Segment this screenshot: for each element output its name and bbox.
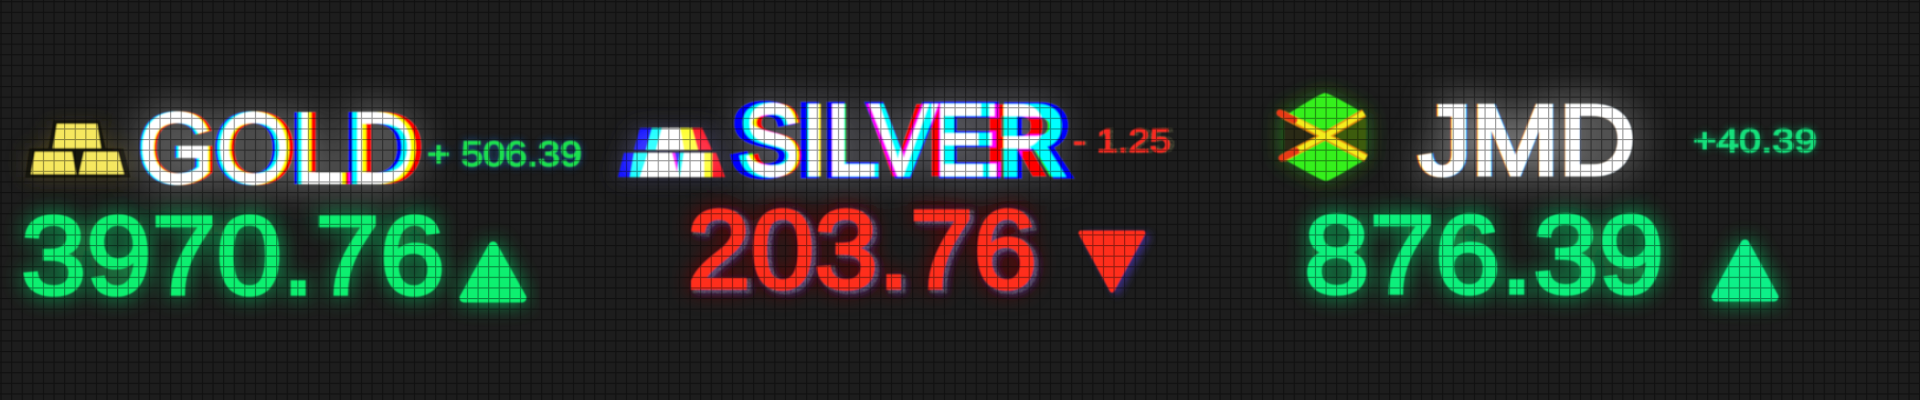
value: 876.39: 876.39 <box>1304 193 1664 317</box>
heading: GOLD: GOLD <box>138 93 418 203</box>
heading: GOLD: GOLD <box>140 93 424 203</box>
heading: GOLD: GOLD <box>138 93 418 203</box>
arrow: down <box>1081 233 1148 293</box>
heading: JMD: JMD <box>1419 85 1635 195</box>
heading: SILVER: SILVER <box>738 85 1066 195</box>
change: minus 1.25: - 1.25 <box>1075 122 1175 159</box>
value: 203.76: 203.76 <box>687 188 1037 312</box>
ticker content <box>21 85 1817 318</box>
heading: SILVER: SILVER <box>737 85 1062 195</box>
heading: SILVER: SILVER <box>745 85 1047 195</box>
change: minus 1.25: - 1.25 <box>1073 122 1171 159</box>
heading: SILVER: SILVER <box>731 85 1071 195</box>
heading: JMD: JMD <box>1420 85 1635 195</box>
value: 3970.76: 3970.76 <box>21 194 445 318</box>
panel: silver <box>614 85 1175 315</box>
panel: gold <box>21 93 582 318</box>
change: plus 40.39: +40.39 <box>1693 122 1817 159</box>
change: plus 506.39: + 506.39 <box>427 135 582 174</box>
arrow: up <box>1716 244 1774 297</box>
value: 876.39: 876.39 <box>1304 193 1664 317</box>
value: 203.76: 203.76 <box>687 188 1037 312</box>
value: 203.76: 203.76 <box>691 191 1041 315</box>
value: 3970.76: 3970.76 <box>21 194 445 318</box>
icon: silver bars <box>614 128 730 177</box>
change: plus 506.39: + 506.39 <box>427 135 582 174</box>
panel: jmd <box>1280 85 1817 317</box>
heading: JMD: JMD <box>1418 85 1635 195</box>
heading: JMD: JMD <box>1419 85 1635 195</box>
icon: jamaican flag diamond <box>1280 92 1367 182</box>
arrow: up <box>464 246 522 298</box>
change: plus 40.39: +40.39 <box>1693 122 1817 159</box>
icon: gold bars <box>26 121 130 177</box>
value: 203.76: 203.76 <box>690 190 1040 314</box>
heading: GOLD: GOLD <box>137 93 413 203</box>
